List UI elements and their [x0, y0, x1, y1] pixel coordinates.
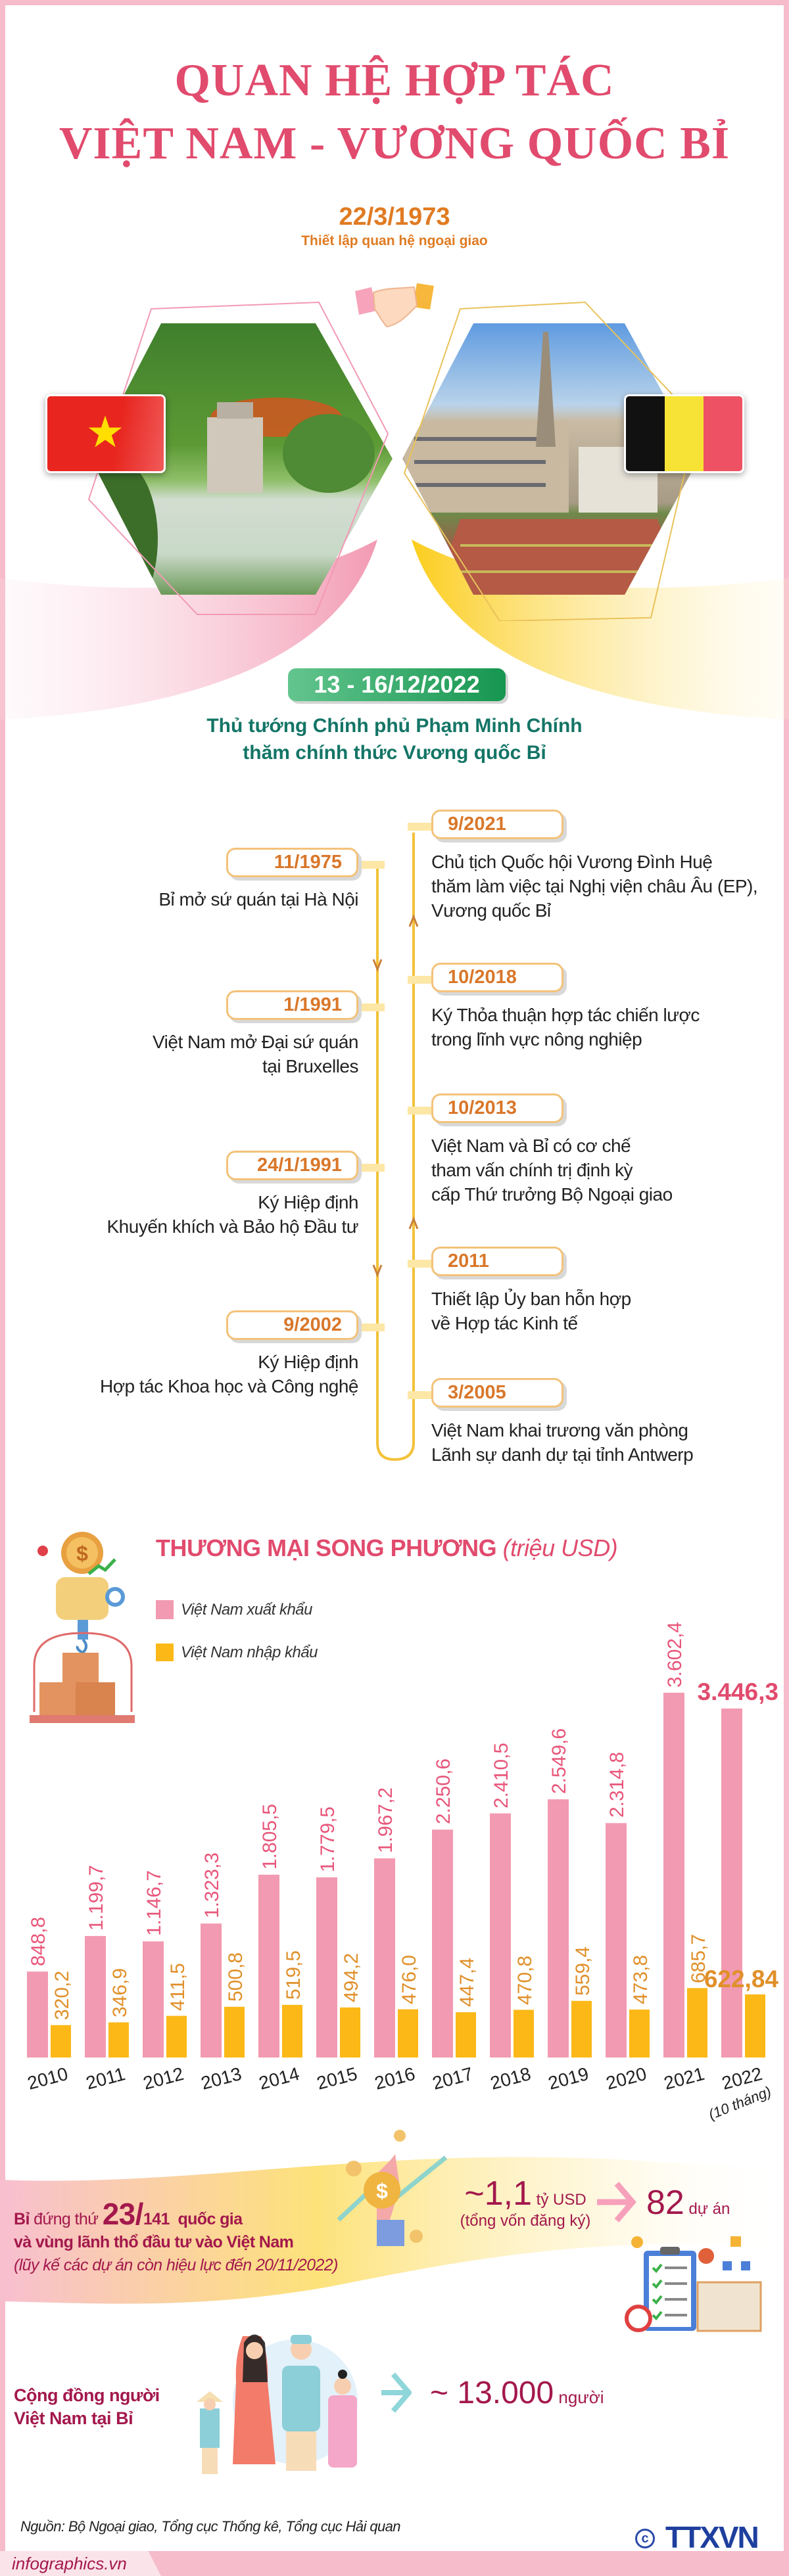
community count: ~ 13.000 người: [430, 2376, 604, 2410]
footer strip: [0, 2551, 789, 2576]
bar chart: 2019: [546, 2063, 591, 2094]
timeline: 24/1/1991: 24/1/1991: [257, 1155, 342, 1176]
bar chart: 1.323,3: [201, 1852, 223, 1918]
bar chart: 685,7: [688, 1934, 709, 1983]
timeline: 10/2018: 10/2018: [448, 967, 517, 988]
bar chart: 500,8: [225, 1952, 247, 2002]
timeline: 1/1991: tại Bruxelles: [262, 1056, 358, 1076]
investment capital: (tổng vốn đăng ký): [460, 2212, 590, 2230]
logo: TTXVN: TTXVN: [665, 2520, 758, 2554]
arrow: pink: [597, 2182, 636, 2222]
bar chart: 3.446,3: [698, 1678, 778, 1705]
icon: hand with coin: $: [376, 2179, 388, 2203]
swoosh: pink: [0, 540, 789, 720]
timeline: 24/1/1991: [107, 1151, 385, 1237]
legend: Việt Nam xuất khẩu: [181, 1601, 312, 1619]
timeline: 10/2013: [408, 1093, 673, 1205]
timeline: 3/2005: Lãnh sự danh dự tại tỉnh Antwerp: [431, 1444, 693, 1465]
investment ranking text: và vùng lãnh thổ đầu tư vào Việt Nam: [14, 2233, 293, 2251]
timeline: 10/2018: Ký Thỏa thuận hợp tác chiến lược: [431, 1005, 700, 1025]
visit date pill: [288, 668, 506, 701]
bar chart: 2.410,5: [490, 1743, 512, 1808]
timeline: 10/2013: Việt Nam và Bỉ có cơ chế: [431, 1136, 631, 1156]
visit description: Thủ tướng Chính phủ Phạm Minh Chính: [206, 715, 583, 737]
bar chart: 2017: [430, 2063, 475, 2094]
timeline: 11/1975: 11/1975: [274, 852, 342, 873]
timeline: 9/2002: 9/2002: [283, 1314, 342, 1335]
timeline: 1/1991: [153, 990, 385, 1076]
establishment date: [301, 203, 488, 248]
timeline: 1/1991: 1/1991: [283, 994, 342, 1015]
timeline: 10/2013: 10/2013: [448, 1097, 517, 1118]
bar chart: 411,5: [167, 1963, 189, 2011]
bar chart: 473,8: [630, 1955, 652, 2004]
bar chart: 2020: [604, 2063, 649, 2094]
timeline: 2011: 2011: [448, 1251, 489, 1272]
logo: TTXVN: Vietnam News Agency: [707, 2551, 767, 2558]
bar chart: 1.967,2: [375, 1787, 396, 1853]
timeline: 9/2021: Chủ tịch Quốc hội Vương Đình Huệ: [431, 852, 712, 872]
community label: Cộng đồng người: [14, 2385, 160, 2405]
bar chart: 1.805,5: [259, 1804, 281, 1870]
bar chart: [25, 1622, 778, 2123]
timeline: 24/1/1991: Khuyến khích và Bảo hộ Đầu tư: [107, 1216, 358, 1237]
visit description: thăm chính thức Vương quốc Bỉ: [243, 742, 546, 764]
title: VIỆT NAM - VƯƠNG QUỐC BỈ: [59, 118, 730, 169]
bar chart: 2015: [314, 2063, 360, 2094]
footer strip: infographics.vn: [12, 2554, 127, 2573]
bar chart: 2.549,6: [548, 1728, 570, 1794]
flag: Belgium: [624, 394, 744, 473]
timeline: 2011: về Hợp tác Kinh tế: [431, 1313, 578, 1333]
investment capital: [460, 2174, 590, 2230]
legend: Việt Nam nhập khẩu: [181, 1644, 318, 1661]
establishment date: Thiết lập quan hệ ngoại giao: [301, 233, 488, 248]
timeline: 11/1975: Bỉ mở sứ quán tại Hà Nội: [158, 889, 358, 909]
icon: money scale with boxes: $: [76, 1542, 88, 1565]
title: [59, 55, 730, 169]
community label: Việt Nam tại Bỉ: [14, 2408, 133, 2428]
bar chart: 519,5: [283, 1950, 304, 2000]
timeline line: [372, 833, 418, 1461]
bar chart: 622,84: [704, 1966, 778, 1992]
timeline: 9/2021: Vương quốc Bỉ: [431, 900, 551, 921]
icon: handshake: [355, 283, 434, 327]
icon: clipboard: [625, 2236, 761, 2332]
bar chart: 2010: [25, 2063, 70, 2094]
bar chart: 3.602,4: [664, 1622, 686, 1688]
community label: [14, 2385, 160, 2428]
timeline: 3/2005: Việt Nam khai trương văn phòng: [431, 1420, 688, 1440]
bar chart: 2021: [661, 2063, 707, 2094]
icon: family: [197, 2334, 358, 2474]
investment ranking text: Bỉ đứng thứ 23/141 quốc gia: [14, 2197, 242, 2231]
timeline: 9/2021: [408, 810, 757, 921]
investment ranking text: [14, 2197, 338, 2274]
bar chart: 1.146,7: [143, 1870, 165, 1936]
bar chart: 559,4: [572, 1946, 594, 1996]
bar chart: 2013: [199, 2063, 244, 2094]
bar chart: 1.779,5: [317, 1806, 339, 1872]
bar chart: (10 tháng): [706, 2083, 773, 2123]
establishment date: 22/3/1973: [339, 203, 450, 231]
timeline: 11/1975: [158, 848, 385, 909]
bar chart: 346,9: [109, 1968, 131, 2017]
investment band: [5, 2157, 692, 2304]
icon: hand with coin: [337, 2130, 447, 2246]
photo: Hanoi hexagon: [88, 302, 393, 615]
bar chart: 476,0: [398, 1955, 420, 2004]
investment ranking text: (lũy kế các dự án còn hiệu lực đến 20/11/2022): [14, 2256, 338, 2274]
timeline: 3/2005: [408, 1378, 693, 1465]
bar chart: 848,8: [28, 1917, 49, 1966]
bar chart: 320,2: [51, 1971, 73, 2020]
bar chart: 447,4: [456, 1958, 478, 2007]
source: Nguồn: Bộ Ngoại giao, Tổng cục Thống kê, Tổng cục Hải quan: [20, 2518, 400, 2535]
logo: TTXVN: c: [641, 2531, 649, 2546]
bar chart: 2011: [84, 2063, 128, 2094]
bar chart: 1.199,7: [85, 1865, 107, 1931]
chart title: THƯƠNG MẠI SONG PHƯƠNG (triệu USD): [156, 1534, 617, 1561]
bar chart: 494,2: [341, 1953, 362, 2002]
bar chart: 2.250,6: [433, 1759, 454, 1824]
bar chart: 2.314,8: [606, 1752, 628, 1818]
bar chart: 2022: [719, 2063, 765, 2094]
icon: money scale with boxes: [30, 1532, 135, 1723]
timeline: 9/2002: [100, 1310, 385, 1396]
timeline: 10/2018: [408, 963, 700, 1049]
timeline: 2011: [408, 1247, 631, 1333]
timeline: 9/2002: Ký Hiệp định: [258, 1352, 358, 1372]
timeline: 9/2021: 9/2021: [448, 814, 506, 835]
investment capital: ~1,1 tỷ USD: [464, 2174, 586, 2213]
title: QUAN HỆ HỢP TÁC: [174, 55, 615, 106]
timeline: 24/1/1991: Ký Hiệp định: [258, 1192, 358, 1212]
timeline: 3/2005: 3/2005: [448, 1382, 506, 1403]
timeline: 9/2021: thăm làm việc tại Nghị viện châu Âu (EP),: [431, 876, 757, 896]
bar chart: 2014: [256, 2063, 302, 2094]
logo: TTXVN: [635, 2520, 767, 2558]
photo: Brussels hexagon: [402, 302, 691, 621]
timeline: 2011: Thiết lập Ủy ban hỗn hợp: [431, 1289, 631, 1309]
bar chart: 2012: [141, 2063, 186, 2094]
timeline: 10/2013: cấp Thứ trưởng Bộ Ngoại giao: [431, 1184, 673, 1205]
arrow: teal: [381, 2372, 412, 2413]
timeline: 10/2013: tham vấn chính trị định kỳ: [431, 1160, 633, 1180]
visit description: [206, 715, 583, 764]
timeline: 1/1991: Việt Nam mở Đại sứ quán: [153, 1032, 358, 1052]
visit date pill: 13 - 16/12/2022: [314, 671, 480, 698]
bar chart: 2016: [372, 2063, 418, 2094]
timeline: 10/2018: trong lĩnh vực nông nghiệp: [431, 1029, 642, 1049]
bar chart: 470,8: [514, 1956, 536, 2005]
projects count: 82 dự án: [646, 2184, 730, 2222]
bar chart: 2018: [488, 2063, 533, 2094]
legend: [156, 1600, 318, 1661]
timeline: 9/2002: Hợp tác Khoa học và Công nghệ: [100, 1376, 358, 1396]
flag: Vietnam: [45, 394, 166, 473]
